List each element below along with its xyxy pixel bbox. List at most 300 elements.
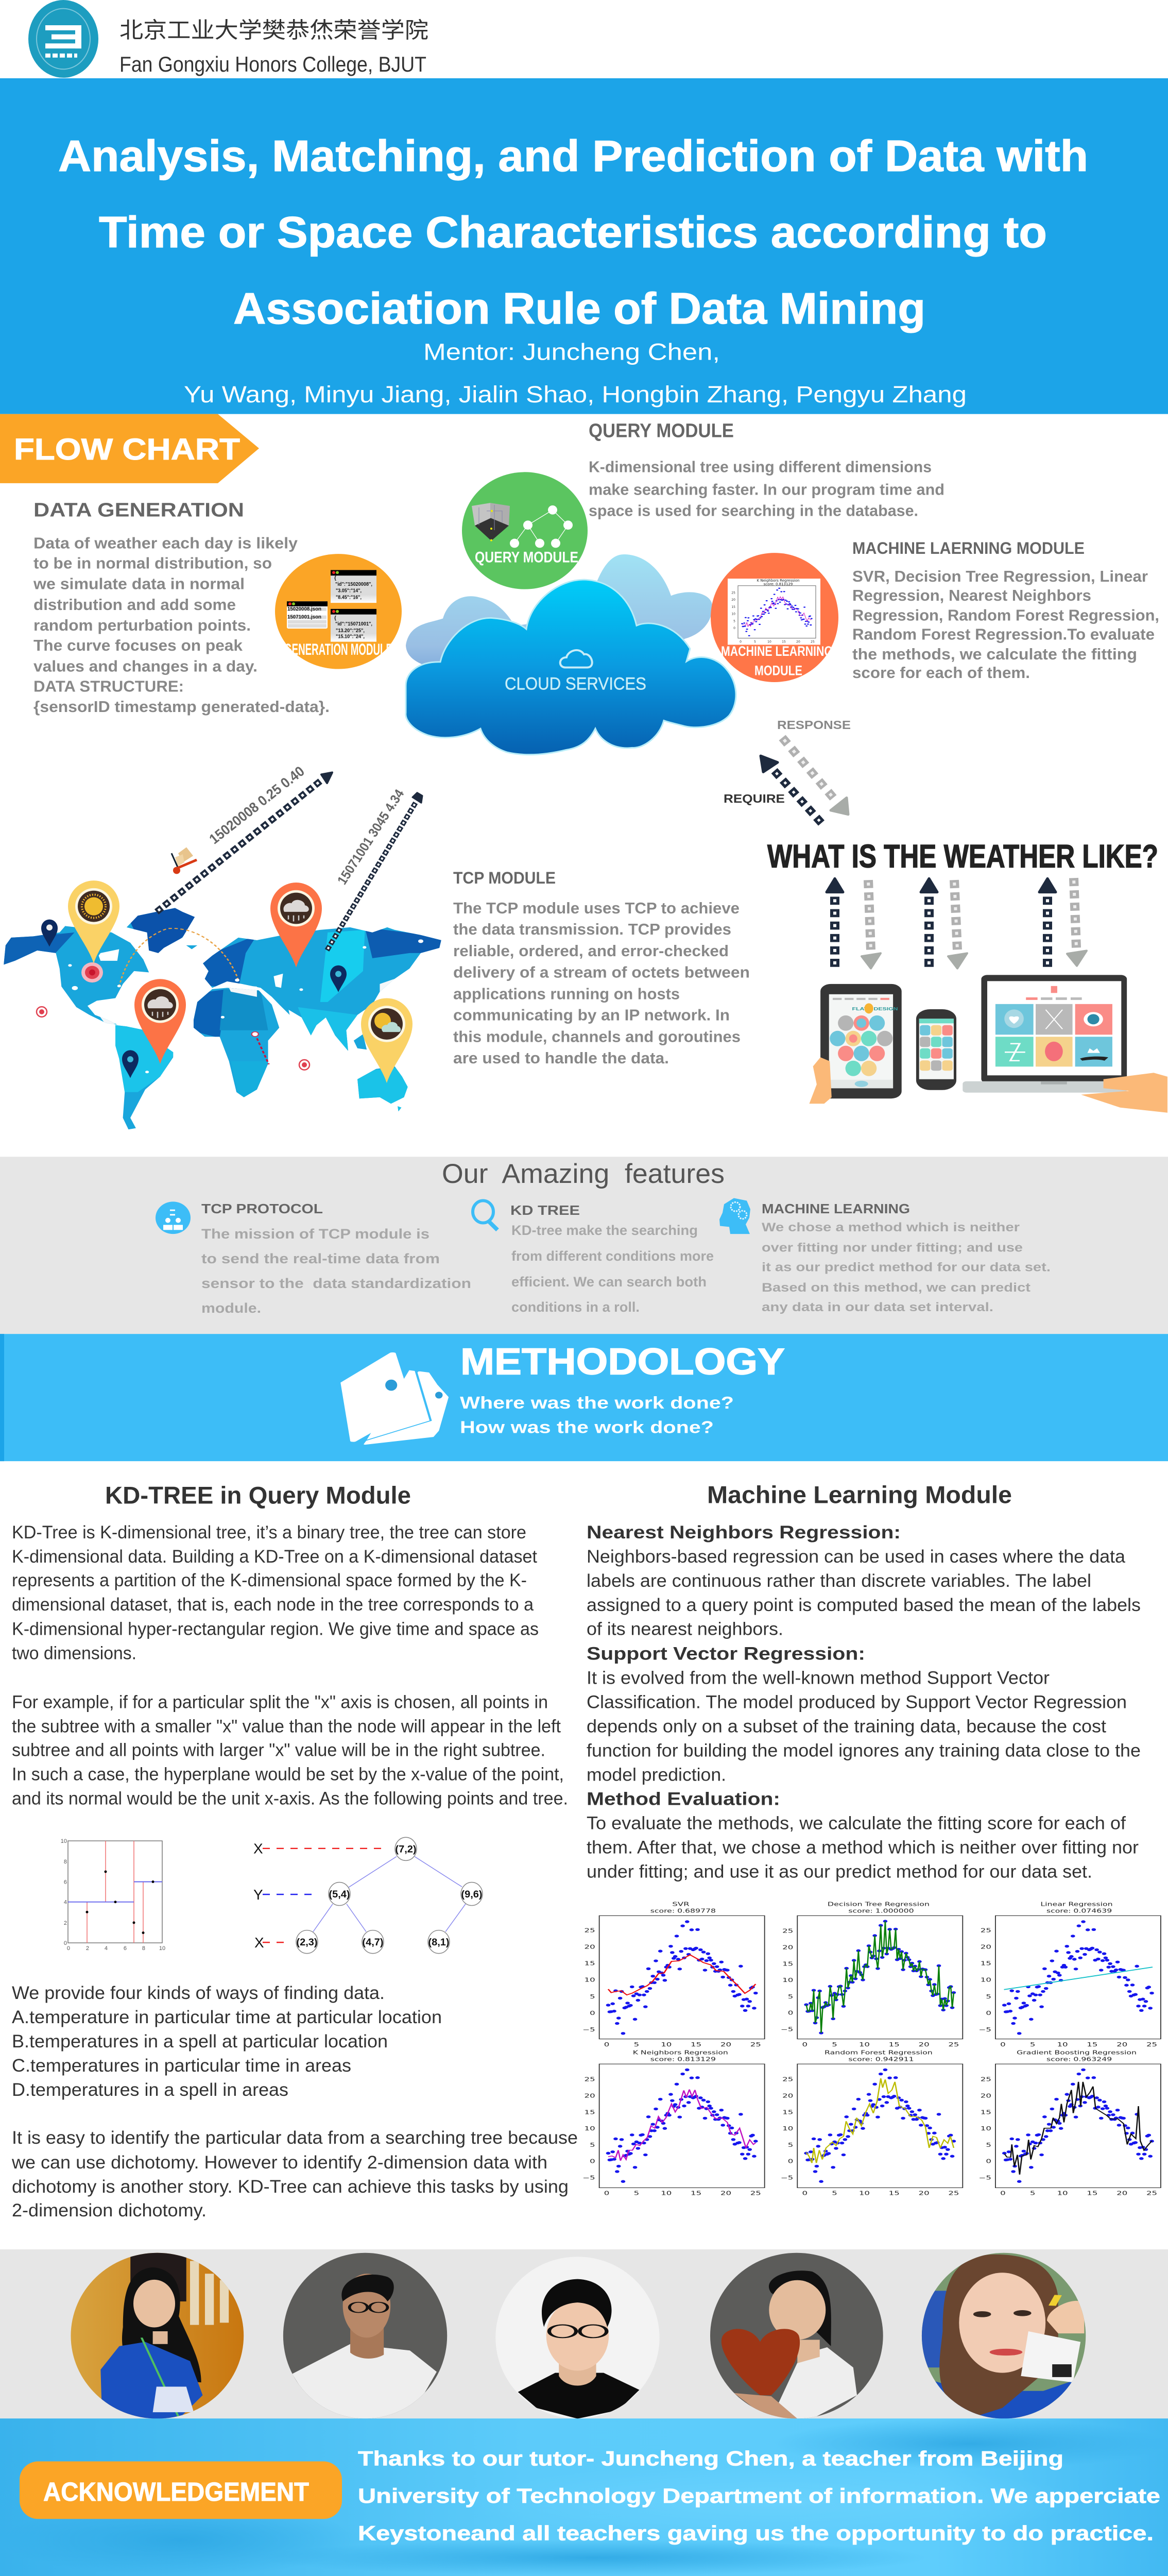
label: machine learning module: MODULE (754, 663, 802, 678)
chart: k neighbors mini plot: 25 (811, 640, 815, 644)
heading: data generation: DATA GENERATION (33, 499, 244, 521)
text block: finding data: we can use dichotomy. However to identify 2-dimension data with (11, 2152, 547, 2173)
generation module circle (275, 554, 402, 669)
body: data generation: DATA STRUCTURE: (33, 677, 184, 696)
chart: k neighbors (582, 2049, 765, 2196)
panel: kd-tree in query module (11, 1482, 578, 2221)
chart: partition plot: 10 (61, 1838, 67, 1844)
chart: decision tree: Decision Tree Regression (828, 1901, 930, 1907)
chart: k neighbors: 25 (585, 2077, 595, 2082)
label: machine learning module: MACHINE LEARNING (721, 643, 833, 659)
chart: kd tree diagram: (9,6) (461, 1889, 483, 1900)
body: tcp module: are used to handle the data. (453, 1049, 669, 1067)
icon: kd cube (472, 503, 510, 541)
chart: svr: 10 (585, 1977, 595, 1983)
text block: thanks: Thanks to our tutor- Juncheng Chen, a teacher from Beijing (358, 2447, 1063, 2470)
request and response arrows (724, 718, 851, 823)
chart: k neighbors: 10 (661, 2190, 672, 2196)
label: response: RESPONSE (777, 718, 851, 732)
chart: linear regression: 15 (1087, 2042, 1097, 2048)
panel: machine learning module (582, 1482, 1161, 2196)
chart: gradient boosting: 10 (1057, 2190, 1068, 2196)
chart: k neighbors: −5 (582, 2175, 595, 2181)
body: tcp module: this module, channels and goroutines (453, 1028, 741, 1046)
chart: partition plot: 2 (86, 1945, 89, 1952)
text block: machine learning methods: Classification. The model produced by Support Vector Regression (587, 1692, 1127, 1712)
chart: partition plot: 8 (64, 1859, 67, 1865)
body: data generation: The curve focuses on peak (33, 637, 243, 654)
text block: kd-tree introduction: For example, if for a particular split the "x" axis is chosen, all points in (12, 1692, 548, 1712)
questions: Where was the work done? (460, 1394, 734, 1413)
text block: kd-tree introduction: two dimensions. (12, 1643, 136, 1663)
chart: decision tree: 20 (919, 2042, 930, 2048)
body: data generation: random perturbation points. (33, 616, 251, 634)
chart: k neighbors: 10 (585, 2126, 595, 2132)
window: file contents 2: "id":"15071001", (335, 621, 372, 627)
body: tcp module: The TCP module uses TCP to achieve (453, 899, 740, 917)
map: continents (0, 902, 447, 1133)
icon: right hand (1081, 1073, 1167, 1113)
text block: finding data: B.temperatures in a spell at particular location (12, 2031, 388, 2052)
body: data generation: Data of weather each day is likely (33, 534, 298, 552)
text block: machine learning methods (587, 1522, 1141, 1882)
chart: linear regression: 15 (981, 1961, 991, 1967)
body: data generation: {sensorID timestamp generated-data}. (33, 698, 330, 716)
college name in Chinese: 北京工业大学樊恭烋荣誉学院 (119, 19, 428, 43)
chart: svr: 15 (585, 1961, 595, 1967)
chart: linear regression: 10 (1057, 2042, 1068, 2048)
heading: methodology: METHODOLOGY (460, 1341, 785, 1382)
chart: gradient boosting: 20 (981, 2093, 991, 2099)
window: file contents 2: { (334, 616, 336, 621)
text block: machine learning methods: It is evolved from the well-known method Support Vector (587, 1668, 1050, 1688)
chart: decision tree: 15 (889, 2042, 900, 2048)
chart: gradient boosting: 25 (1146, 2190, 1157, 2196)
chart: kd tree diagram: (8,1) (428, 1937, 450, 1948)
chart: gradient boosting: 20 (1117, 2190, 1127, 2196)
chart: random forest: 20 (919, 2190, 930, 2196)
body: tcp module (453, 899, 750, 1067)
chart: gradient boosting: score: 0.963249 (1046, 2056, 1112, 2062)
body: machine learning module (852, 567, 1159, 682)
text block: machine learning methods: assigned to a query point is computed based the mean of the labels (587, 1595, 1141, 1615)
chart: partition plot (61, 1838, 165, 1952)
chart: random forest: 5 (832, 2190, 837, 2196)
chart: linear regression: 10 (981, 1977, 991, 1983)
label: sensor record 1: 15020008 0.25 0.40 (206, 763, 307, 847)
chart: partition plot: 8 (142, 1945, 145, 1952)
chart: k neighbors mini plot: 15 (731, 605, 735, 609)
chart: k neighbors mini plot: 10 (731, 613, 735, 616)
window: file list: 15071001.json (287, 615, 321, 620)
chart: partition plot: 6 (124, 1945, 127, 1952)
feature: kd tree (473, 1200, 714, 1315)
world map with weather pins (0, 763, 447, 1133)
text block: kd-tree introduction: KD-Tree is K-dimensional tree, it’s a binary tree, the tree can store (12, 1522, 526, 1543)
body: tcp module: applications running on hosts (453, 985, 680, 1003)
text block: thanks: Keystoneand all teachers gaving us the opportunity to do practice. (358, 2521, 1154, 2545)
pin: yellow sunny (68, 880, 119, 963)
icon: tablet (820, 984, 902, 1098)
title banner (0, 78, 1168, 414)
arrow: data stream 2 (327, 793, 422, 950)
feature: tcp protocol: module. (201, 1300, 261, 1316)
feature: kd tree: KD-tree make the searching (511, 1223, 698, 1238)
portrait 3 (492, 2255, 663, 2419)
window: file contents 1: "8.45":"16", (336, 595, 362, 600)
label: sensor record 2: 15071001 3045 4.34 (335, 787, 407, 887)
chart: decision tree: 10 (859, 2042, 870, 2048)
chart: k neighbors mini plot: score: 0.813129 (764, 582, 793, 586)
text block: machine learning module (852, 538, 1159, 682)
text block: finding data: C.temperatures in particular time in areas (12, 2055, 351, 2076)
chart: linear regression: 0 (1000, 2042, 1006, 2048)
feature: machine learning: over fitting nor under fitting; and use (762, 1241, 1023, 1255)
chart: linear regression: 25 (981, 1928, 991, 1934)
feature: machine learning: MACHINE LEARNING (762, 1202, 910, 1216)
chart: k neighbors: 15 (691, 2190, 701, 2196)
chart: svr (582, 1901, 765, 2048)
window: file contents 2: "13.20":"25", (336, 628, 365, 634)
chart: svr: 20 (720, 2042, 731, 2048)
chart: k neighbors mini plot: 0 (740, 640, 742, 644)
body: tcp module: communicating by an IP network. In (453, 1006, 730, 1024)
window: file contents 1: "id":"15020008", (335, 582, 372, 587)
text block: thanks: University of Technology Department of information. We apperciate (358, 2484, 1160, 2507)
text block: finding data: dichotomy is another story. KD-Tree can achieve this tasks by using (12, 2176, 569, 2197)
chart: random forest: 0 (788, 2159, 793, 2165)
body: tcp module: reliable, ordered, and error-checked (453, 942, 729, 960)
feature: kd tree: KD TREE (510, 1204, 580, 1218)
panel: team portraits (0, 2249, 1168, 2419)
chart: svr: 5 (590, 1994, 595, 2000)
body: machine learning module: Regression, Random Forest Regression, (852, 606, 1159, 624)
heading: machine learning module: Machine Learning Module (707, 1482, 1012, 1509)
body: machine learning module: SVR, Decision Tree Regression, Linear (852, 567, 1148, 585)
button: acknowledgement: ACKNOWLEDGEMENT (43, 2477, 309, 2506)
chart: svr: 5 (634, 2042, 639, 2048)
chart: gradient boosting: 15 (981, 2109, 991, 2115)
chart: decision tree: score: 1.000000 (848, 1908, 914, 1914)
query module circle (462, 472, 588, 589)
chart: kd tree diagram: (2,3) (296, 1937, 318, 1948)
chart: svr: 25 (750, 2042, 761, 2048)
body: query module: make searching faster. In our program time and (589, 481, 944, 498)
feature: tcp protocol: TCP PROTOCOL (201, 1202, 323, 1216)
body: query module (589, 458, 944, 519)
chart: decision tree: 0 (788, 2010, 793, 2016)
chart: svr: score: 0.689778 (650, 1908, 716, 1914)
text block: machine learning methods: Method Evaluation: (587, 1789, 780, 1809)
portrait 1 (67, 2252, 246, 2419)
text block: kd-tree introduction: K-dimensional hyper-rectangular region. We give time and space as (12, 1619, 539, 1639)
route: dashed orange arcs (119, 928, 238, 987)
chart: partition plot: 4 (105, 1945, 108, 1952)
arrow: device column 3 (1039, 878, 1087, 968)
mentor and authors: Yu Wang, Minyu Jiang, Jialin Shao, Hongbin Zhang, Pengyu Zhang (184, 381, 967, 408)
chart: k neighbors: 0 (590, 2159, 595, 2165)
chart: partition plot: 4 (64, 1900, 67, 1906)
chart: linear regression: 5 (1030, 2042, 1036, 2048)
chart: k neighbors: K Neighbors Regression (633, 2049, 728, 2056)
main cloud (406, 580, 736, 755)
mentor and authors: Mentor: Juncheng Chen, (423, 339, 720, 365)
college name in English: Fan Gongxiu Honors College, BJUT (119, 53, 426, 77)
portrait 4 (708, 2252, 887, 2419)
chart: k neighbors: 5 (634, 2190, 639, 2196)
title: Time or Space Characteristics according to (99, 208, 1047, 257)
text block: tcp module (453, 868, 750, 1067)
feature: machine learning: any data in our data set interval. (762, 1300, 993, 1314)
arrow: require chain (761, 756, 821, 823)
icon: tcp protocol (156, 1201, 191, 1234)
chart: kd tree diagram: X (254, 1935, 264, 1951)
window: file list: 15020008.json (287, 606, 321, 612)
title (58, 132, 1088, 333)
label: require: REQUIRE (724, 792, 785, 806)
chart: kd tree diagram: Y (253, 1887, 263, 1903)
text block: kd-tree introduction: and its normal would be the unit x-axis. As the following points and tree. (12, 1788, 568, 1808)
chart: k neighbors: 5 (590, 2142, 595, 2148)
portrait 2 (280, 2252, 451, 2419)
chart: decision tree: 15 (782, 1961, 793, 1967)
chart: svr: SVR (672, 1901, 690, 1907)
body: data generation: values and changes in a day. (33, 657, 257, 675)
panel: methodology banner (0, 1334, 1168, 1461)
icon: hand truck with box (171, 847, 197, 874)
charts: regression comparison (582, 1901, 1161, 2196)
chart: k neighbors mini plot: 5 (754, 640, 756, 644)
chart: svr: 10 (661, 2042, 672, 2048)
feature: tcp protocol: sensor to the data standardization (201, 1276, 471, 1291)
text block: finding data: It is easy to identify the particular data from a searching tree because (12, 2127, 578, 2148)
icon: phone (916, 1009, 956, 1090)
chart: linear regression: 20 (981, 1944, 991, 1951)
body: query module: K-dimensional tree using different dimensions (589, 458, 932, 476)
icon: left hand (809, 1057, 832, 1104)
chart: svr: −5 (582, 2027, 595, 2033)
body: tcp module: delivery of a stream of octets between (453, 963, 750, 981)
chart: random forest: 10 (782, 2126, 793, 2132)
chart: k neighbors mini plot: 20 (796, 640, 800, 644)
questions: How was the work done? (460, 1418, 714, 1437)
chart: gradient boosting: 10 (981, 2126, 991, 2132)
chart: kd tree diagram (253, 1837, 483, 1954)
chart: kd tree diagram: (7,2) (395, 1844, 417, 1855)
icon: stacked cards (343, 1353, 447, 1444)
chart: linear regression: Linear Regression (1040, 1901, 1113, 1907)
chart: k neighbors: score: 0.813129 (650, 2056, 716, 2062)
text block: data generation (33, 499, 330, 716)
chart: decision tree: 25 (782, 1928, 793, 1935)
chart: random forest: score: 0.942911 (848, 2056, 914, 2062)
window: file contents 1 (331, 570, 376, 603)
flow chart arrow heading: FLOW CHART (14, 432, 240, 466)
chart: k neighbors mini plot: 15 (782, 640, 786, 644)
chart: k neighbors: 15 (585, 2109, 595, 2115)
chart: linear regression: 25 (1146, 2042, 1157, 2048)
chart: k neighbors: 0 (604, 2190, 609, 2196)
body: data generation: we simulate data in normal (33, 575, 245, 593)
chart: random forest (781, 2049, 963, 2196)
chart: k neighbors mini plot (728, 579, 820, 645)
body: data generation (33, 534, 330, 716)
chart: k neighbors mini plot: 0 (733, 626, 735, 630)
text block: finding data (11, 1982, 578, 2221)
chart: linear regression: 5 (986, 1994, 991, 2000)
chart: random forest: 15 (889, 2190, 900, 2196)
chart: gradient boosting (978, 2049, 1161, 2196)
body: data generation: distribution and add some (33, 596, 236, 614)
body: machine learning module: Regression, Nearest Neighbors (852, 586, 1091, 604)
chart: gradient boosting: 5 (1030, 2190, 1036, 2196)
chart: random forest: 5 (788, 2142, 793, 2148)
text block: machine learning methods: Nearest Neighbors Regression: (587, 1522, 901, 1543)
text block: machine learning methods: function for building the model ignores any training data close to the (587, 1740, 1141, 1760)
icon: laptop (963, 975, 1127, 1093)
chart: gradient boosting: 0 (986, 2159, 991, 2165)
chart: k neighbors: 25 (750, 2190, 761, 2196)
cloud services illustration (406, 554, 736, 755)
feature: machine learning: Based on this method, we can predict (762, 1281, 1030, 1295)
chart: random forest: 15 (782, 2109, 793, 2115)
chart: gradient boosting: 25 (981, 2077, 991, 2082)
text block: machine learning methods: under fitting; and use it as our predict method for our data set. (587, 1861, 1092, 1882)
feature: machine learning: We chose a method which is neither (762, 1221, 1020, 1234)
chart: gradient boosting: 15 (1087, 2190, 1097, 2196)
heading: kd-tree: KD-TREE in Query Module (105, 1482, 411, 1509)
window: file contents 1: { (334, 575, 336, 581)
body: machine learning module: score for each of them. (852, 664, 1030, 682)
icon: small tree (510, 505, 573, 548)
chart: decision tree: −5 (781, 2026, 793, 2032)
icon: college logo (28, 0, 98, 78)
chart: decision tree (781, 1901, 963, 2048)
machine learning module circle (711, 553, 838, 682)
chart: random forest: −5 (781, 2175, 793, 2181)
chart: k neighbors mini plot: 25 (731, 591, 735, 595)
body: data generation: to be in normal distribution, so (33, 554, 272, 572)
text block: query module (589, 420, 944, 519)
feature: machine learning (719, 1198, 1051, 1314)
arrow: response chain (782, 738, 848, 815)
label: machine learning module (722, 646, 831, 675)
chart: decision tree: 10 (782, 1977, 793, 1984)
heading: machine laerning module: MACHINE LAERNING MODULE (852, 538, 1085, 557)
feature: tcp protocol: to send the real-time data from (201, 1251, 440, 1266)
chart: random forest: 25 (782, 2077, 793, 2082)
feature: kd tree: conditions in a roll. (511, 1299, 640, 1315)
chart: partition plot: 6 (64, 1879, 67, 1885)
text block: machine learning methods: labels are continuous rather than discrete variables. The label (587, 1570, 1091, 1591)
chart: random forest: Random Forest Regression (825, 2049, 933, 2056)
feature: kd tree: from different conditions more (511, 1248, 714, 1264)
title: Association Rule of Data Mining (233, 284, 925, 333)
text block: machine learning methods: Neighbors-based regression can be used in cases where the data (587, 1546, 1125, 1567)
text block: kd-tree introduction: In such a case, the hyperplane would be set by the x-value of the point, (12, 1764, 564, 1784)
icon: tablet: DESIGN (873, 1007, 898, 1011)
text block: machine learning methods: them. After that, we chose a method which is neither over fitting nor (587, 1837, 1139, 1858)
chart: k neighbors mini plot: 20 (731, 598, 735, 602)
chart: k neighbors mini plot: K Neighbors Regression (757, 579, 799, 583)
text block: kd-tree introduction: subtree and all points with larger "x" value will be in the right subtree. (12, 1740, 545, 1760)
chart: partition plot: 10 (159, 1945, 165, 1952)
back cloud (406, 554, 712, 707)
chart: random forest: 10 (859, 2190, 870, 2196)
chart: partition plot: 0 (67, 1945, 70, 1952)
chart: linear regression: 20 (1117, 2042, 1127, 2048)
text block: finding data: 2-dimension dichotomy. (12, 2200, 207, 2221)
title: Analysis, Matching, and Prediction of Data with (58, 132, 1088, 181)
text block: kd-tree introduction (12, 1522, 568, 1808)
text block: finding data: A.temperature in particular time at particular location (12, 2007, 442, 2027)
heading: tcp module: TCP MODULE (453, 868, 556, 887)
body: query module: space is used for searching in the database. (589, 502, 918, 519)
chart: k neighbors mini plot: 10 (767, 640, 771, 644)
chart: k neighbors: 20 (585, 2093, 595, 2099)
arrow: data stream 1 (157, 772, 332, 912)
feature: tcp protocol: The mission of TCP module is (201, 1226, 430, 1242)
chart: decision tree: 25 (948, 2042, 959, 2048)
header: college logo and name (28, 0, 428, 78)
chart: decision tree: 5 (788, 1994, 793, 2000)
chart: decision tree: 0 (802, 2042, 808, 2048)
window: file contents 2 (331, 609, 376, 642)
chart: svr: 0 (590, 2010, 595, 2016)
window: file contents 2: "15.10":"24", (336, 634, 365, 640)
heading: features: Our Amazing features (442, 1159, 725, 1189)
text block: kd-tree introduction: K-dimensional data. Building a KD-Tree on a K-dimensional dataset (12, 1546, 537, 1567)
body: tcp module: the data transmission. TCP provides (453, 920, 731, 938)
body: machine learning module: the methods, we calculate the fitting (852, 645, 1137, 663)
arrows: device chains (827, 878, 1087, 969)
label: generation module: GENERATION MODULE (284, 640, 392, 658)
arrow: device column 1 (827, 878, 881, 969)
icon: tablet: FLAT (852, 1007, 868, 1011)
icon: head with gears (719, 1198, 750, 1234)
pins: small navy (41, 920, 347, 1078)
panel: our amazing features (0, 1157, 1168, 1334)
chart: svr: 20 (585, 1944, 595, 1951)
chart: kd tree diagram: (4,7) (362, 1937, 384, 1948)
chart: kd tree diagram: X (253, 1841, 263, 1857)
chart: gradient boosting: −5 (978, 2175, 991, 2181)
pin: yellow partly cloudy (361, 998, 413, 1083)
text block: machine learning methods: To evaluate the methods, we calculate the fitting score for each of (587, 1813, 1126, 1833)
chart: random forest: 20 (782, 2093, 793, 2099)
chart: gradient boosting: Gradient Boosting Regression (1017, 2049, 1137, 2056)
chart: linear regression: 0 (986, 2010, 991, 2016)
text block: kd-tree introduction: the subtree with a smaller "x" value than the node will appear in the left (12, 1716, 561, 1736)
pin: orange rainy 2 (270, 883, 322, 968)
window: file list (287, 601, 328, 629)
label: query module: QUERY MODULE (475, 549, 578, 566)
text block: machine learning methods: Support Vector Regression: (587, 1643, 865, 1664)
arrow: device column 2 (921, 878, 967, 969)
chart: partition plot: 2 (64, 1920, 67, 1926)
chart: svr: 15 (691, 2042, 701, 2048)
small location dots (68, 939, 423, 1073)
pin: orange rainy (134, 979, 186, 1064)
feature: kd tree: efficient. We can search both (511, 1274, 707, 1290)
chart: k neighbors mini plot: 5 (733, 619, 735, 623)
chart: linear regression: −5 (978, 2027, 991, 2033)
chart: svr: 0 (604, 2042, 609, 2048)
chart: k neighbors: 20 (720, 2190, 731, 2196)
heading: query module: QUERY MODULE (589, 420, 734, 442)
text block: kd-tree introduction: dimensional dataset, that is, each node in the tree corresponds to a (12, 1595, 534, 1615)
chart: decision tree: 20 (782, 1945, 793, 1951)
